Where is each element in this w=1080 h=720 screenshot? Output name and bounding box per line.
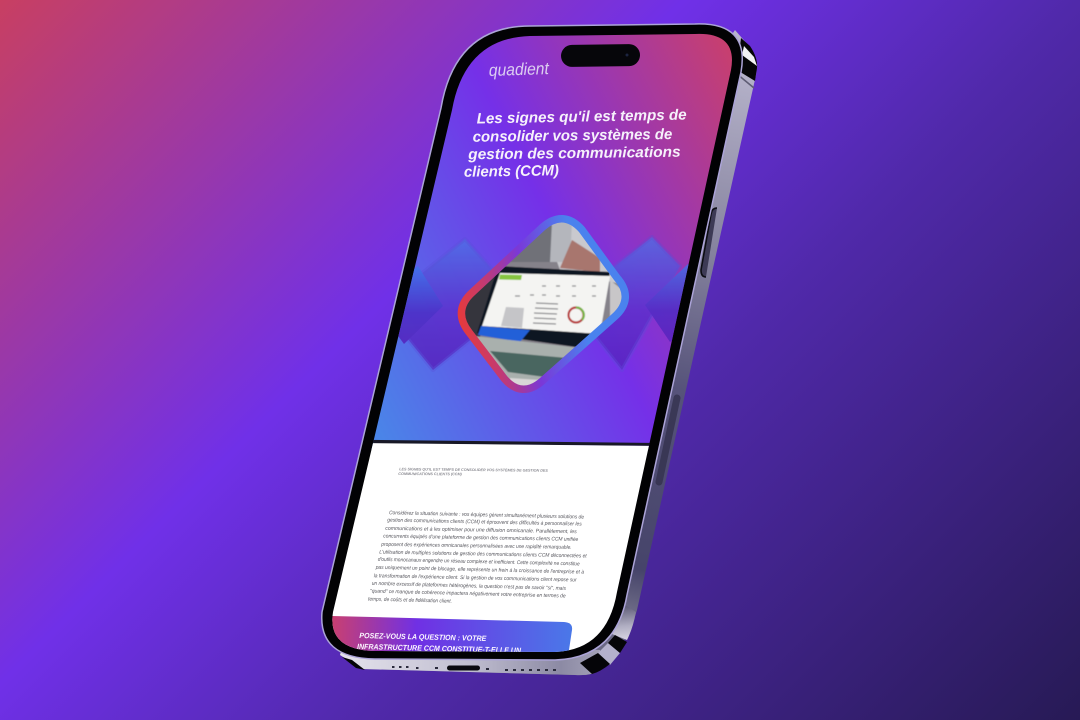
body paragraph: un nombre excessif de plateformes hétérogènes, la question n'est pas de savoir "si", mais: [372, 581, 566, 592]
hero gradient panel: [371, 34, 732, 450]
body paragraph: proposent des expériences omnicanales personnalisées avec une rapidité remarquable.: [380, 542, 572, 551]
donut chart: [568, 307, 584, 322]
laptop body: [477, 266, 610, 350]
body paragraph: la transformation de l'expérience client. Si la gestion de vos communications client repose sur: [374, 573, 577, 583]
screen: [332, 34, 732, 652]
phone side body: [340, 30, 757, 675]
laptop screen: [482, 273, 610, 334]
title: Les signes qu'il est temps de: [476, 107, 687, 127]
white content panel: [332, 443, 649, 652]
decorative diamonds left: [398, 239, 492, 372]
callout text: INFRASTRUCTURE CCM CONSTITUE-T-ELLE UN: [357, 642, 522, 655]
title: consolider vos systèmes de: [473, 126, 672, 146]
title: gestion des communications: [467, 144, 681, 163]
dashboard rows: [515, 286, 596, 324]
small heading: LES SIGNES QU'IL EST TEMPS DE CONSOLIDER VOS SYSTÈMES DE GESTION DES: [399, 466, 548, 473]
keyboard: [490, 351, 567, 377]
bottom speaker and port: [392, 666, 556, 670]
body paragraph: communications et à les optimiser pour une diffusion omnicanale. Parallèlement, les: [385, 526, 577, 535]
body paragraph: pas uniquement un point de blocage, elle représente un frein à la croissance de l'entreprise et à: [375, 565, 584, 576]
decorative diamonds right: [596, 235, 688, 372]
body paragraph: temps, de coûts et de fidélisation client.: [368, 597, 452, 605]
body paragraph: Considérez la situation suivante : vos équipes gèrent simultanément plusieurs solutions de: [389, 510, 584, 521]
green header: [499, 274, 522, 280]
logo: quadient: quadient: [489, 59, 550, 80]
central diamond frame: [465, 222, 622, 386]
phone black bezel with silver rim: [322, 24, 742, 660]
side volume pill: [659, 398, 677, 482]
dark divider: [373, 440, 650, 446]
side button: [701, 208, 717, 277]
body paragraph: "quand" ce manque de cohérence impactera négativement votre entreprise en termes de: [370, 589, 566, 599]
body paragraph: concurrents équipés d'une plateforme de gestion des communications clients CCM unifiée: [383, 534, 578, 543]
title: clients (CCM): [464, 162, 559, 181]
wallpaper: [478, 326, 530, 342]
data table: [501, 307, 524, 328]
phone mockup: [320, 24, 757, 675]
keyboard deck: [476, 336, 575, 380]
callout text: [357, 632, 522, 652]
small heading: COMMUNICATIONS CLIENTS (CCM): [398, 472, 463, 476]
body paragraph: L'utilisation de multiples solutions de gestion des communications clients CCM déconnectées et: [379, 550, 587, 559]
body paragraph: gestion des communications clients (CCM) et éprouvent des difficultés à personnaliser les: [387, 518, 582, 528]
body paragraph: [368, 510, 587, 605]
callout card: [332, 616, 572, 652]
laptop photo: [465, 222, 622, 386]
small heading: [398, 468, 548, 476]
body paragraph: d'outils monocanaux engendre un réseau complexe et inefficient. Cette complexité ne constitue: [378, 557, 580, 567]
callout text: POSEZ-VOUS LA QUESTION : VOTRE: [359, 631, 487, 643]
title: [464, 107, 687, 181]
dynamic island: [561, 44, 640, 67]
